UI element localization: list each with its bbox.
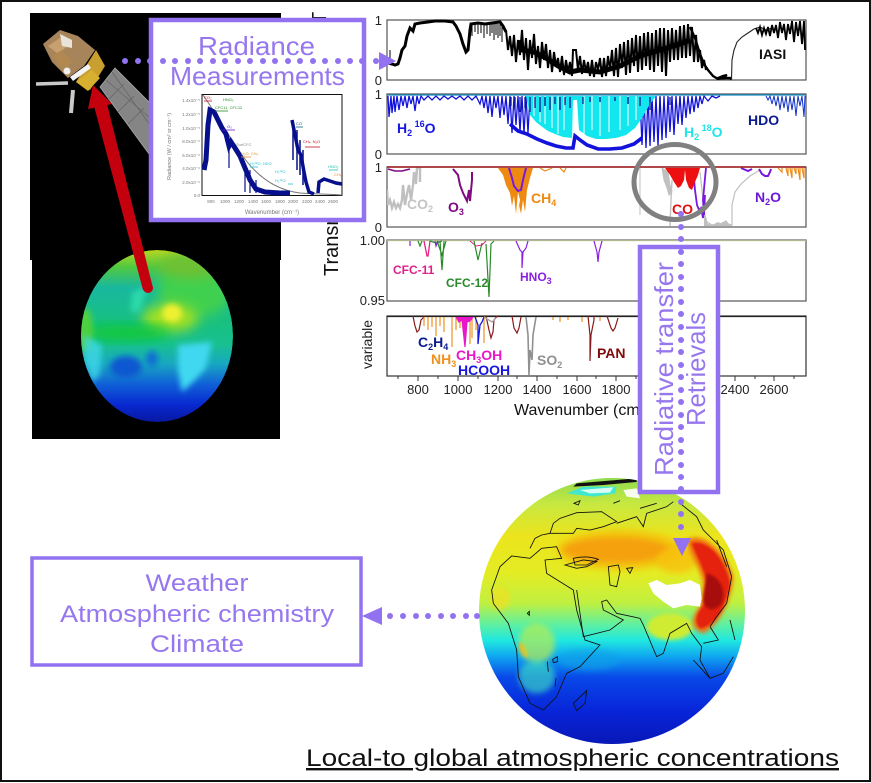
inset chart: radiance spectrum: 2000	[288, 199, 299, 204]
y axis label: variable: variable	[359, 320, 375, 369]
CO2 right band	[640, 168, 672, 215]
inset chart: radiance spectrum: SurfCFC	[236, 142, 252, 147]
label: H2 16O: O	[425, 120, 436, 136]
cyan H2 18O band	[526, 96, 656, 139]
inset chart: radiance spectrum: H₂¹⁸O	[275, 178, 286, 183]
inset chart: radiance spectrum: CH₄	[334, 172, 342, 177]
text: retrievals: Retrievals	[681, 312, 711, 426]
label: N2O: N	[755, 189, 765, 205]
inset chart: radiance spectrum: 800	[207, 199, 215, 204]
label: C2H4: 2	[428, 342, 433, 352]
y axis title fragment: T	[309, 12, 331, 24]
chart: trace gas spectrum	[387, 167, 806, 227]
label: N2O: 2	[765, 197, 770, 207]
inset chart: radiance spectrum: 8.0x10⁻⁶	[182, 139, 200, 144]
text: atmospheric chemistry: Atmospheric chemistry	[60, 601, 334, 628]
dotted arrow: retrieval to global map	[673, 211, 691, 556]
label: H2 18O: 2	[694, 132, 699, 142]
label: CO2: CO	[407, 196, 428, 212]
y axis tick labels: 0	[375, 147, 382, 162]
label: HCOOH: HCOOH	[458, 362, 510, 378]
inset chart: radiance spectrum: 1.0x10⁻⁵	[182, 126, 200, 131]
callout circle around CO band	[634, 144, 716, 220]
label: O3: 3	[459, 207, 464, 217]
inset chart: radiance spectrum: 2400	[315, 199, 326, 204]
label: SO2: SO	[537, 352, 557, 368]
inset chart: radiance spectrum: 2200	[302, 199, 313, 204]
inset chart: radiance spectrum: 1400	[248, 199, 259, 204]
x axis tick labels: 2200	[681, 382, 709, 397]
label: H2 16O: 2	[407, 128, 412, 138]
label: CH3OH: 3	[476, 355, 481, 365]
label: CO: CO	[672, 201, 693, 217]
label: H2 16O: H	[397, 120, 407, 136]
inset chart: radiance spectrum: 4.0x10⁻⁶	[182, 166, 200, 171]
chart: VOC and SO2 spectrum	[387, 316, 806, 378]
inset chart: radiance spectrum: 2.0x10⁻⁶	[182, 180, 200, 185]
CH4 band	[498, 168, 533, 218]
label: HDO: HDO	[748, 112, 779, 128]
label: O3: O	[448, 199, 459, 215]
inset chart: radiance spectrum: 1600	[261, 199, 272, 204]
label: C2H4: C	[418, 334, 428, 350]
N2O in CH4 band	[509, 168, 526, 191]
x axis ticks	[398, 376, 794, 381]
label: CH4: 4	[551, 198, 556, 208]
inset chart: radiance spectrum: H₂O, CH₄	[241, 151, 259, 156]
label: NH3: 3	[451, 359, 456, 369]
x axis tick labels: 1800	[602, 382, 630, 397]
label: CH3OH: CH	[456, 347, 476, 363]
chart: IASI spectrum	[387, 20, 806, 80]
inset chart: radiance spectrum: Radiance (W / cm² sr cm⁻¹)	[167, 113, 173, 180]
icon: global concentration map	[479, 478, 745, 744]
text: radiative transfer: Radiative transfer	[649, 262, 679, 476]
x axis tick labels: 1200	[484, 382, 512, 397]
label: CFC-12: CFC-12	[446, 276, 488, 290]
label: CH3OH: OH	[481, 347, 502, 363]
y axis tick labels: 1	[375, 160, 382, 175]
inset chart: radiance spectrum: 1.2x10⁻⁵	[182, 112, 200, 117]
y axis title: Transmittance	[321, 150, 343, 276]
y axis tick labels	[360, 13, 385, 308]
label: C2H4: 4	[443, 342, 448, 352]
x axis tick labels: 800	[407, 382, 429, 397]
y axis tick labels: 0.95	[360, 293, 385, 308]
panel: satellite over Earth	[30, 13, 281, 439]
label: CFC-11: CFC-11	[393, 263, 435, 277]
label: NH3: NH	[431, 351, 451, 367]
x axis tick labels: 2000	[642, 382, 670, 397]
inset chart: radiance spectrum: HNO₃	[328, 164, 339, 169]
label: N2O: O	[770, 189, 781, 205]
inset chart: radiance spectrum: H₂¹⁶O	[275, 169, 286, 174]
text: weather: Weather	[146, 570, 248, 597]
icon: satellite	[36, 30, 152, 158]
text: climate: Climate	[150, 631, 244, 658]
inset chart: radiance spectrum: CO	[296, 121, 302, 126]
label: H2 18O: H	[684, 124, 694, 140]
dotted arrow: global map to applications	[362, 607, 480, 625]
inset chart: radiance spectrum: 2600	[328, 199, 339, 204]
inset chart: radiance spectrum: CFC11, CFC12	[215, 105, 243, 110]
chart: water vapour spectrum	[387, 94, 806, 154]
inset chart: radiance spectrum: 1800	[275, 199, 286, 204]
chart: CFC and HNO3 spectrum	[387, 240, 806, 301]
x axis title: Wavenumber (cm-1)	[514, 402, 659, 419]
caption: Local-to global atmospheric concentrations	[306, 745, 839, 772]
text: radiance: Radiance	[198, 31, 315, 61]
panel: radiance measurements	[151, 20, 364, 220]
inset chart: radiance spectrum: CO₂	[204, 95, 212, 100]
inset chart: radiance spectrum: O₃	[227, 124, 232, 129]
black space background	[30, 13, 281, 439]
N2O right band	[693, 168, 706, 218]
y axis tick labels: 0	[375, 73, 382, 88]
label: H2 18O: 18	[699, 123, 712, 133]
inset chart: radiance spectrum: 1200	[234, 199, 245, 204]
label: H2 18O: O	[712, 124, 723, 140]
CO band	[665, 168, 700, 190]
panel: applications	[32, 558, 361, 665]
label: CO2: 2	[428, 204, 433, 214]
O3 band	[453, 169, 472, 201]
x axis tick labels: 1600	[563, 382, 591, 397]
label: SO2: 2	[557, 360, 562, 370]
panel: radiative transfer and retrievals	[640, 247, 718, 492]
arrow: measurement path to satellite	[88, 85, 153, 293]
label: PAN: PAN	[597, 345, 626, 361]
coastlines	[492, 501, 735, 711]
CO2 left band	[387, 168, 420, 208]
label: HNO3: 3	[547, 276, 552, 286]
white no-data region	[648, 580, 702, 608]
red emission region	[687, 538, 733, 633]
Greenland	[567, 487, 617, 497]
label: H2 16O: 16	[412, 119, 425, 129]
icon: small Earth globe	[77, 250, 233, 422]
label: C2H4: H	[433, 334, 443, 350]
x axis tick labels: 2600	[760, 382, 788, 397]
y axis tick labels: 1	[375, 13, 382, 28]
inset chart: radiance spectrum: H₂¹⁸O, HDO	[250, 161, 272, 166]
label: IASI: IASI	[759, 46, 786, 62]
y axis tick labels: 0	[375, 220, 382, 235]
dotted arrow: satellite to spectrum	[122, 52, 396, 70]
inset chart: radiance spectrum: HNO₃	[223, 97, 234, 102]
x axis tick labels: 1400	[523, 382, 551, 397]
text: measurements: Measurements	[170, 61, 345, 91]
label: HNO3: HNO	[520, 270, 547, 284]
inset chart: radiance spectrum: CH₄, N₂O	[303, 139, 320, 144]
inset chart: radiance spectrum: 1.4x10⁻⁵	[182, 98, 200, 103]
x axis tick labels	[407, 382, 788, 397]
inset chart: radiance spectrum: 6.0x10⁻⁶	[182, 153, 200, 158]
inset chart: radiance spectrum: 0.0	[194, 193, 200, 198]
orange band over Eurasia	[557, 530, 683, 570]
label: CH4: CH	[531, 190, 551, 206]
x axis tick labels: 1000	[444, 382, 472, 397]
inset chart: radiance spectrum: Wavenumber (cm⁻¹)	[245, 210, 299, 216]
y axis tick labels: 1	[375, 87, 382, 102]
x axis tick labels: 2400	[721, 382, 749, 397]
inset chart: radiance spectrum: 1000	[220, 199, 231, 204]
inset chart: radiance spectrum	[167, 94, 342, 216]
y axis tick labels: 1.00	[360, 233, 385, 248]
